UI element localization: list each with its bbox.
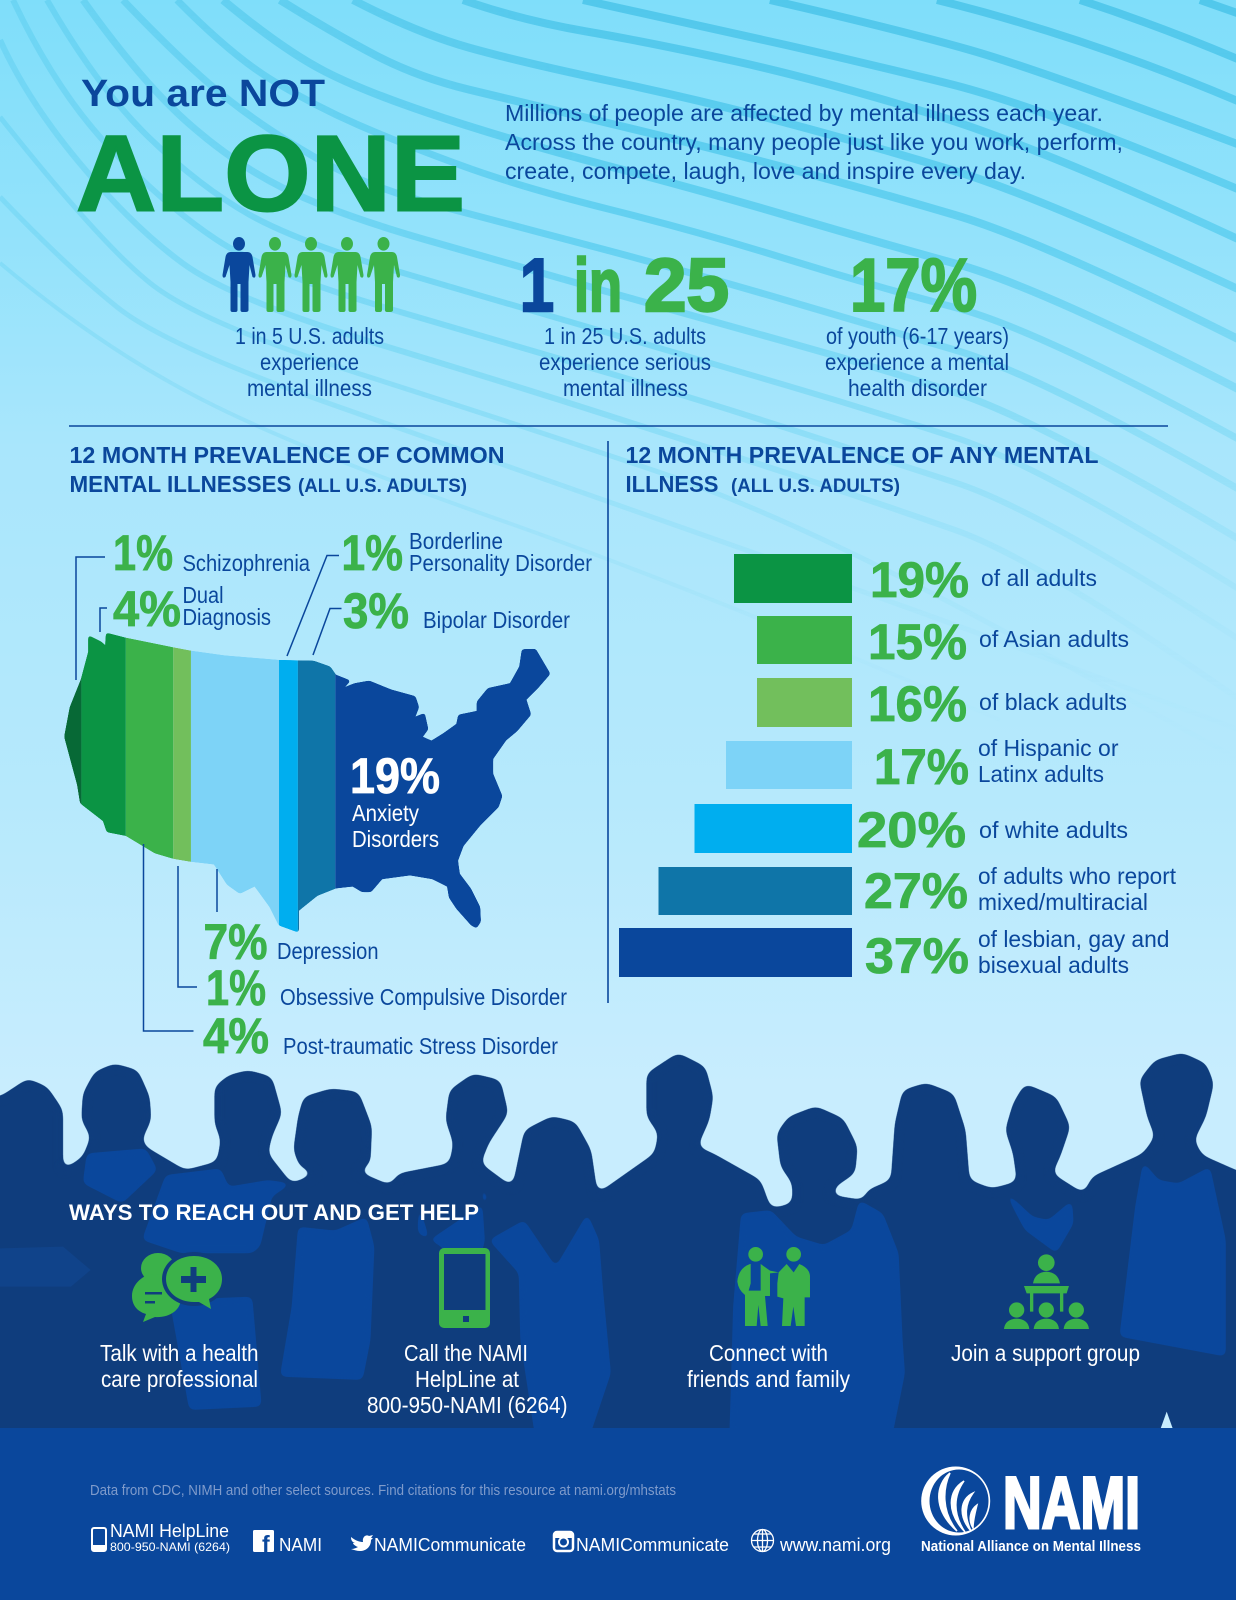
stat text <box>825 323 1009 401</box>
bar: white adults: of white adults <box>979 817 1128 843</box>
instagram: NAMICommunicate <box>576 1535 729 1555</box>
help text: Talk with a health <box>100 1340 258 1366</box>
label: obsessive compulsive disorder <box>206 960 567 1016</box>
help text: HelpLine at <box>415 1366 520 1392</box>
heading: common mental illnesses: (ALL U.S. ADULTS) <box>298 476 467 497</box>
footer <box>0 1428 1236 1600</box>
stat text: 1 in 5 U.S. adults <box>235 323 384 349</box>
heading: any mental illness <box>626 442 1098 497</box>
icon: support group <box>1004 1254 1089 1329</box>
label: schizophrenia: Schizophrenia <box>182 550 310 576</box>
data sources note: Data from CDC, NIMH and other select sources. Find citations for this resource at nami.org/mhstats <box>90 1483 676 1499</box>
big number <box>520 243 729 327</box>
helpline contact <box>92 1521 230 1554</box>
stat: 1 in 5 <box>222 237 400 401</box>
label: depression <box>204 914 378 970</box>
stat text: 1 in 25 U.S. adults <box>544 323 706 349</box>
title <box>76 73 465 234</box>
label: schizophrenia <box>113 525 310 581</box>
logo tagline: National Alliance on Mental Illness <box>921 1539 1141 1555</box>
label: post-traumatic stress disorder: 4% <box>203 1008 269 1064</box>
bar: mixed/multiracial adults <box>658 863 1177 919</box>
label: bipolar disorder: 3% <box>343 583 409 639</box>
label: schizophrenia: 1% <box>113 525 173 581</box>
label: dual diagnosis: Dual <box>182 582 224 608</box>
label: borderline personality disorder <box>342 525 592 581</box>
label: dual diagnosis: Diagnosis <box>182 604 271 630</box>
intro paragraph: Across the country, many people just like you work, perform, <box>505 129 1123 155</box>
bar: black adults: 16% <box>868 676 967 732</box>
help text: 800-950-NAMI (6264) <box>367 1392 568 1418</box>
help text <box>100 1340 258 1392</box>
anxiety label <box>350 748 440 852</box>
icon: chat bubbles <box>132 1252 226 1322</box>
map: US split by illness <box>64 633 550 932</box>
title line: You are NOT: You are NOT <box>81 73 325 115</box>
bar: white adults: 20% <box>857 802 966 858</box>
bar: all adults <box>734 552 1097 608</box>
stat text: experience <box>260 349 359 375</box>
helpline contact: NAMI HelpLine <box>110 1521 229 1541</box>
help item: support group <box>951 1254 1140 1366</box>
crowd silhouettes <box>0 1053 1236 1450</box>
heading: common mental illnesses: 12 MONTH PREVALENCE OF COMMON <box>70 442 504 468</box>
facebook <box>253 1530 322 1557</box>
website: www.nami.org <box>779 1535 891 1555</box>
help text: Join a support group <box>951 1340 1140 1366</box>
stat text: experience a mental <box>825 349 1009 375</box>
logo mark <box>921 1466 990 1536</box>
intro paragraph: Millions of people are affected by mental illness each year. <box>505 100 1103 126</box>
bar chart: any mental illness <box>619 552 1177 984</box>
label: depression: Depression <box>277 938 378 964</box>
heading: any mental illness: 12 MONTH PREVALENCE OF ANY MENTAL <box>626 442 1098 468</box>
anxiety label: Anxiety <box>352 800 419 826</box>
bar: Hispanic or Latinx adults: 17% <box>874 739 969 795</box>
helpline contact: 800-950-NAMI (6264) <box>110 1540 230 1554</box>
bar: mixed/multiracial adults: mixed/multiracial <box>978 889 1148 915</box>
title line: ALONE: ALONE <box>76 112 465 234</box>
big number: 1 <box>520 243 554 327</box>
help text: friends and family <box>687 1366 850 1392</box>
heading: any mental illness: ILLNESS <box>626 471 718 497</box>
help text: Call the NAMI <box>404 1340 528 1366</box>
anxiety label: 19% <box>350 748 440 804</box>
bar: lesbian, gay and bisexual adults: 37% <box>865 928 969 984</box>
icon: five people <box>222 237 400 312</box>
heading: ways to reach out: WAYS TO REACH OUT AND GET HELP <box>69 1200 479 1225</box>
big number: 17% <box>850 243 977 327</box>
icon: phone <box>439 1248 490 1328</box>
label: obsessive compulsive disorder: Obsessive Compulsive Disorder <box>280 984 567 1010</box>
label: borderline personality disorder: 1% <box>342 525 403 581</box>
icon: two people <box>737 1247 810 1326</box>
label: bipolar disorder <box>343 583 570 639</box>
big number: in <box>574 243 622 327</box>
bar: mixed/multiracial adults: 27% <box>864 863 968 919</box>
logo wordmark: NAMI <box>1003 1463 1140 1544</box>
facebook: f <box>262 1531 270 1557</box>
label: obsessive compulsive disorder: 1% <box>206 960 266 1016</box>
bar: lesbian, gay and bisexual adults <box>619 926 1170 984</box>
help text <box>367 1340 568 1418</box>
label: post-traumatic stress disorder <box>203 1008 558 1064</box>
anxiety label: Disorders <box>352 826 439 852</box>
label: dual diagnosis: 4% <box>113 581 181 637</box>
help item: friends and family <box>687 1247 850 1392</box>
bar: Asian adults: 15% <box>868 614 967 670</box>
stat: 1 in 25 <box>520 243 729 401</box>
bar: Hispanic or Latinx adults: of Hispanic or <box>978 735 1119 761</box>
intro paragraph <box>505 100 1123 184</box>
help text: care professional <box>101 1366 258 1392</box>
stat text: experience serious <box>539 349 711 375</box>
big number: 25 <box>644 243 729 327</box>
facebook: NAMI <box>279 1535 322 1555</box>
heading: any mental illness: (ALL U.S. ADULTS) <box>731 476 900 497</box>
label: borderline personality disorder: Borderline <box>409 528 503 554</box>
bar: Hispanic or Latinx adults: Latinx adults <box>978 761 1104 787</box>
stat: 17% <box>825 243 1009 401</box>
label: depression: 7% <box>204 914 268 970</box>
stat text: mental illness <box>247 375 372 401</box>
heading: common mental illnesses: MENTAL ILLNESSES <box>70 471 292 497</box>
bar: Hispanic or Latinx adults <box>726 735 1119 795</box>
bar: Asian adults <box>757 614 1129 670</box>
label: bipolar disorder: Bipolar Disorder <box>423 607 570 633</box>
label: borderline personality disorder: Personality Disorder <box>409 550 592 576</box>
bar: all adults: 19% <box>870 552 969 608</box>
stat text: health disorder <box>848 375 987 401</box>
bar: black adults: of black adults <box>979 689 1127 715</box>
background <box>0 0 1236 960</box>
bar: Asian adults: of Asian adults <box>979 626 1129 652</box>
twitter: NAMICommunicate <box>374 1535 526 1555</box>
stat text: mental illness <box>563 375 688 401</box>
label: post-traumatic stress disorder: Post-traumatic Stress Disorder <box>283 1033 558 1059</box>
help item: call the helpline <box>367 1248 568 1418</box>
map strips <box>64 633 550 932</box>
stat text: of youth (6-17 years) <box>826 323 1009 349</box>
bar: mixed/multiracial adults: of adults who report <box>978 863 1177 889</box>
bar: white adults <box>694 802 1128 858</box>
help text <box>687 1340 850 1392</box>
stat text <box>235 323 384 401</box>
label: dual diagnosis <box>113 581 271 637</box>
bar: lesbian, gay and bisexual adults: bisexual adults <box>978 952 1129 978</box>
bar: black adults <box>757 676 1127 732</box>
stat text <box>539 323 711 401</box>
logo: NAMI <box>921 1463 1141 1555</box>
bar: all adults: of all adults <box>981 565 1097 591</box>
intro paragraph: create, compete, laugh, love and inspire every day. <box>505 158 1026 184</box>
bar: lesbian, gay and bisexual adults: of lesbian, gay and <box>978 926 1170 952</box>
help text: Connect with <box>709 1340 828 1366</box>
heading: common mental illnesses <box>70 442 504 497</box>
website <box>752 1530 891 1555</box>
help item: health care professional <box>100 1252 258 1392</box>
